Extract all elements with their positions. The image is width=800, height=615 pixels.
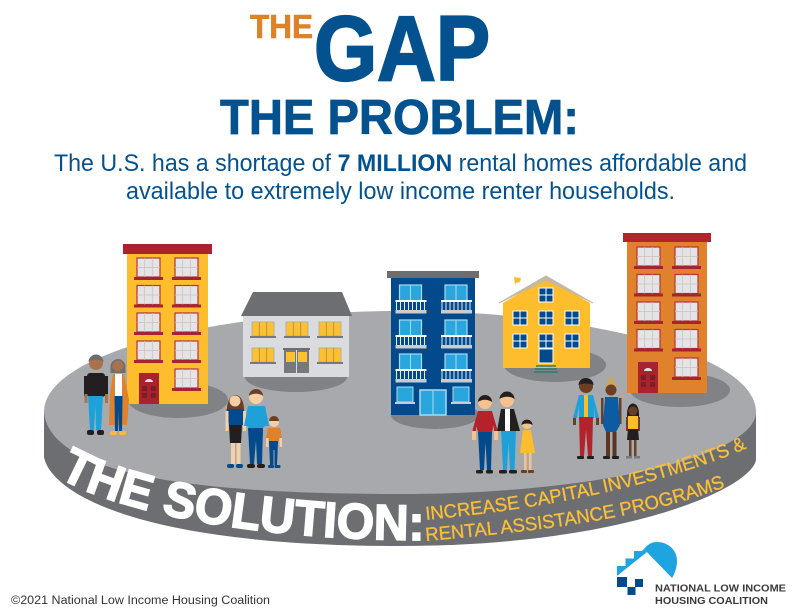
text block: problem statement xyxy=(54,150,747,205)
logo: National Low Income Housing Coalition: HOUSING COALITION xyxy=(655,595,768,607)
text block: problem statement: The U.S. has a shortage of 7 MILLION rental homes affordable and xyxy=(54,150,747,177)
people: family with hat xyxy=(573,375,640,459)
platform disc xyxy=(44,311,756,546)
copyright: ©2021 National Low Income Housing Coalition xyxy=(11,595,270,607)
heading: The Solution on disc edge: THE SOLUTION: xyxy=(66,446,421,541)
logo: National Low Income Housing Coalition xyxy=(617,542,786,607)
building: blue apartment xyxy=(387,271,479,415)
heading: The Problem: THE PROBLEM: xyxy=(220,91,579,145)
people: family with girl xyxy=(472,392,535,474)
building: orange apartment xyxy=(623,233,711,393)
building: yellow apartment xyxy=(123,244,212,404)
text: solution details: RENTAL ASSISTANCE PROGRAMS xyxy=(426,476,724,541)
people: older couple xyxy=(84,355,129,435)
people: family with boy xyxy=(226,389,282,468)
logo: National Low Income Housing Coalition: NATIONAL LOW INCOME xyxy=(655,582,786,594)
title: The Gap xyxy=(250,0,490,100)
building shadows xyxy=(128,348,730,429)
title: The Gap: GAP xyxy=(314,0,490,100)
text: solution details: INCREASE CAPITAL INVESTMENTS & xyxy=(426,438,747,520)
title: The Gap: THE xyxy=(250,8,313,45)
building: yellow house xyxy=(499,276,593,372)
building: grey house xyxy=(241,292,352,377)
text block: problem statement: available to extremely low income renter households. xyxy=(126,178,675,205)
